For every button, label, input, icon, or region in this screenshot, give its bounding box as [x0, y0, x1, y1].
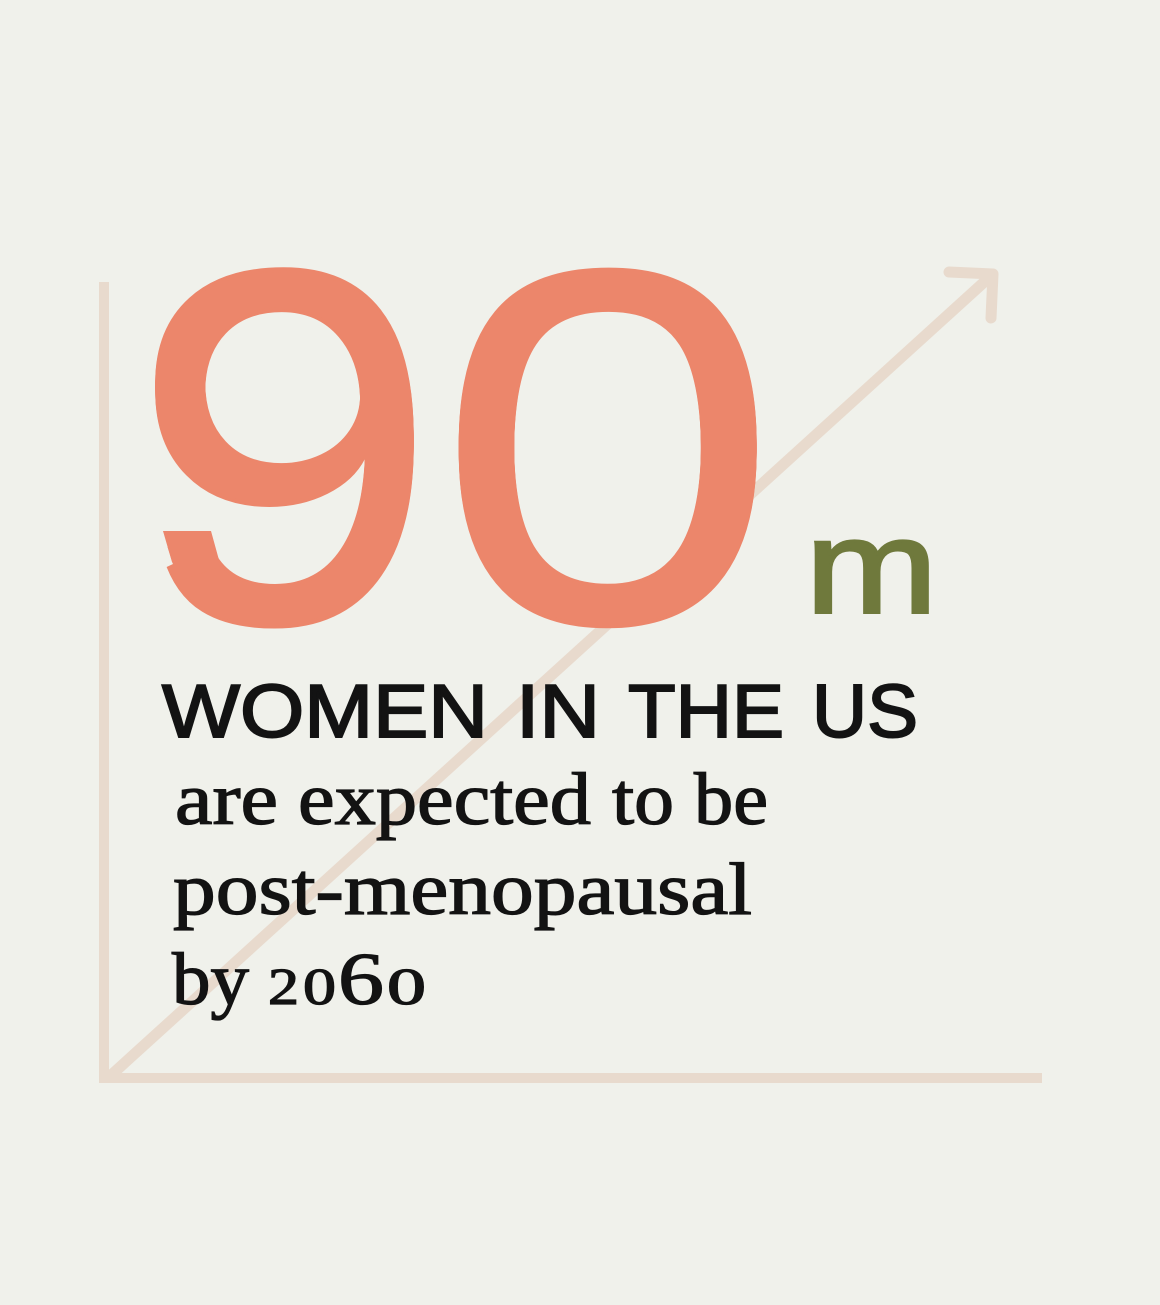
body text: post-menopausal [173, 849, 752, 931]
body text: 0 [303, 959, 336, 1016]
body text: are [175, 759, 278, 841]
rising arrow [108, 272, 993, 1078]
body text: 0 [387, 959, 426, 1016]
big number 90: 0 [434, 170, 781, 725]
heading: women in the us: WOMEN [162, 669, 488, 753]
body text [172, 759, 768, 1021]
heading: women in the us: THE [628, 669, 784, 753]
body text: by [172, 939, 249, 1021]
chart axes [104, 282, 1042, 1078]
body text: 2 [268, 959, 299, 1016]
body text: 6 [338, 939, 384, 1021]
big number 90 [129, 170, 781, 725]
body text: to [612, 759, 674, 841]
body text: expected [298, 759, 591, 841]
heading: women in the us: US [812, 669, 918, 753]
heading: women in the us: IN [516, 669, 600, 753]
unit m: m [806, 494, 938, 642]
body text: be [694, 759, 768, 841]
big number 90: 9 [129, 170, 440, 725]
